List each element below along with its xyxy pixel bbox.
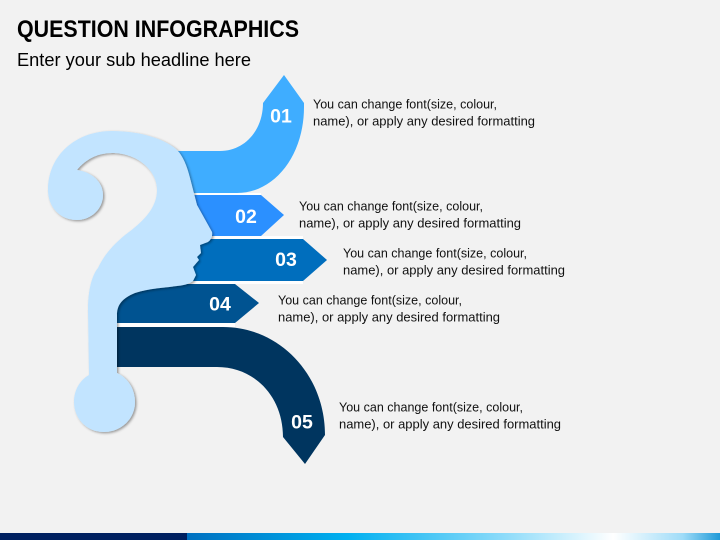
ribbon 02 <box>185 195 284 236</box>
text block 02: name), or apply any desired formatting <box>299 216 521 230</box>
text block 01: You can change font(size, colour, <box>313 96 497 112</box>
ribbon 05 <box>110 327 325 464</box>
text block 01: name), or apply any desired formatting <box>313 114 535 128</box>
text block 04: name), or apply any desired formatting <box>278 310 500 324</box>
title: QUESTION INFOGRAPHICS <box>17 16 299 43</box>
ribbon 03 <box>185 239 327 281</box>
text block 05: You can change font(size, colour, <box>339 400 523 414</box>
text block 05: name), or apply any desired formatting <box>339 416 561 432</box>
subtitle: Enter your sub headline here <box>17 50 251 70</box>
text block 04: You can change font(size, colour, <box>278 292 462 308</box>
ribbon 03: 03 <box>275 249 297 271</box>
ribbon 05: 05 <box>291 412 313 434</box>
head and question mark <box>48 131 212 432</box>
ribbon 02: 02 <box>235 206 257 228</box>
footer bar <box>0 533 720 540</box>
text block 03: You can change font(size, colour, <box>343 246 527 260</box>
ribbon 04 <box>110 284 259 323</box>
text block 03: name), or apply any desired formatting <box>343 262 565 278</box>
ribbon 04: 04 <box>209 294 231 316</box>
ribbon 01 <box>170 75 304 193</box>
text block 02: You can change font(size, colour, <box>299 198 483 214</box>
ribbon 01: 01 <box>270 106 292 128</box>
